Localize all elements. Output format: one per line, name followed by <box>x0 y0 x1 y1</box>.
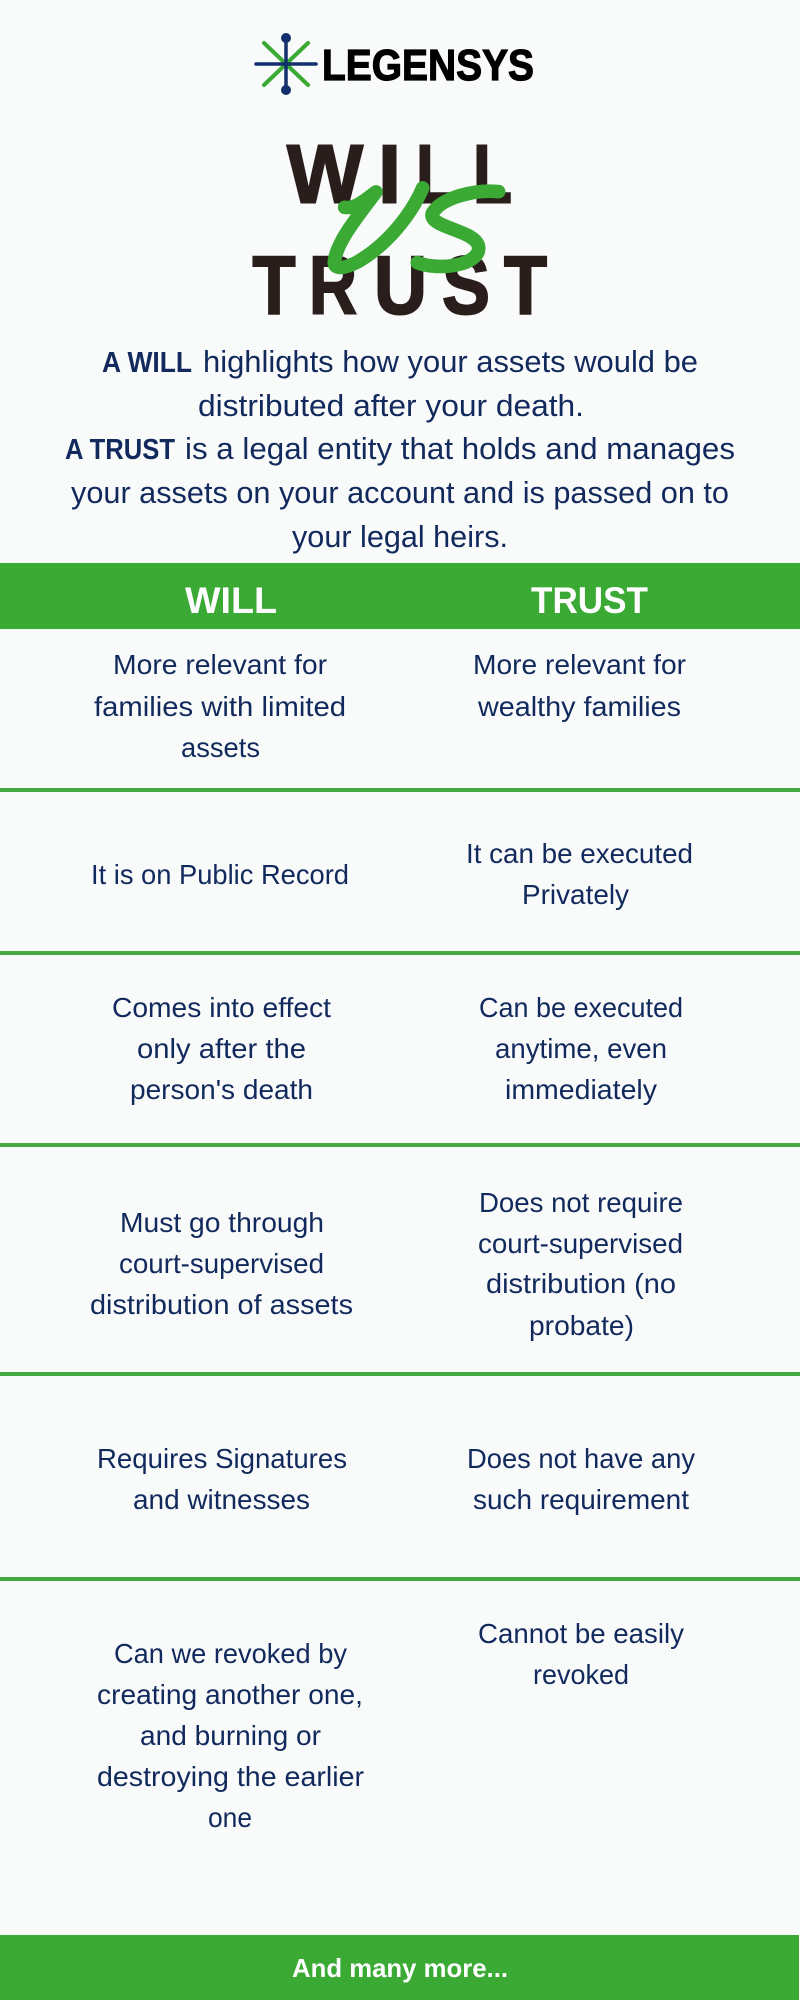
will cell: distribution of assets <box>90 1289 353 1320</box>
trust cell: court-supervised <box>478 1228 683 1259</box>
will cell: Comes into effect <box>112 992 331 1023</box>
trust cell: such requirement <box>473 1484 689 1515</box>
title word: TRUST: T <box>252 238 296 332</box>
trust cell: wealthy families <box>477 691 681 722</box>
text block: intro definitions: distributed after your death. <box>198 389 584 423</box>
will cell: destroying the earlier <box>97 1761 364 1792</box>
trust cell: anytime, even <box>495 1033 667 1064</box>
text block: intro definitions: A TRUST <box>65 434 176 466</box>
row 2: record <box>91 838 693 910</box>
text block: intro definitions: your assets on your account and is passed on to <box>71 476 729 510</box>
trust cell: It can be executed <box>466 838 693 869</box>
column heading: WILL: WILL <box>185 580 277 621</box>
text block: intro definitions: your legal heirs. <box>292 520 508 554</box>
trust cell: Can be executed <box>479 992 683 1023</box>
row 4: probate <box>90 1187 683 1341</box>
title word: WILL: W <box>287 128 364 220</box>
trust cell <box>478 1187 683 1341</box>
title: Will vs Trust <box>252 128 547 332</box>
will cell <box>90 1207 353 1320</box>
will cell: and witnesses <box>133 1484 310 1515</box>
icon: logo asterisk <box>256 33 316 95</box>
will cell: assets <box>181 732 260 763</box>
will cell <box>94 649 346 763</box>
title word: TRUST: R <box>309 238 357 332</box>
trust cell: Does not require <box>479 1187 683 1218</box>
row 3: timing <box>112 992 683 1105</box>
will cell <box>112 992 331 1105</box>
trust cell: More relevant for <box>473 649 686 680</box>
trust cell <box>478 1618 684 1690</box>
title word: WILL: L <box>473 128 512 220</box>
will cell: Must go through <box>120 1207 324 1238</box>
row 6: revocation <box>97 1618 684 1833</box>
will cell: It is on Public Record <box>91 859 349 890</box>
will cell: court-supervised <box>119 1248 324 1279</box>
will cell <box>97 1443 347 1515</box>
will cell: person's death <box>130 1074 313 1105</box>
text block: intro definitions: A WILL <box>102 347 192 379</box>
logo wordmark: LEGENSYS <box>322 41 534 90</box>
trust cell <box>479 992 683 1105</box>
trust cell: Does not have any <box>467 1443 695 1474</box>
icon: handwritten vs brush lettering <box>334 188 499 267</box>
will cell: one <box>208 1802 252 1833</box>
title word: TRUST: T <box>504 238 547 332</box>
text block: intro definitions <box>65 345 735 554</box>
will cell: More relevant for <box>113 649 327 680</box>
footer band <box>0 1935 799 2000</box>
title word: WILL: I <box>378 128 401 220</box>
trust cell: Privately <box>522 879 629 910</box>
row 1: relevance <box>94 649 686 763</box>
column heading: TRUST: TRUST <box>531 580 648 621</box>
title word: WILL <box>287 128 512 220</box>
title word: TRUST: U <box>374 238 427 332</box>
trust cell: probate) <box>529 1310 634 1341</box>
will cell: only after the <box>137 1033 306 1064</box>
table header band <box>0 563 800 629</box>
will cell: and burning or <box>140 1720 321 1751</box>
logo: Legensys <box>256 33 534 95</box>
trust cell: Cannot be easily <box>478 1618 684 1649</box>
will cell: Can we revoked by <box>114 1638 347 1669</box>
row 5: signatures <box>97 1443 695 1515</box>
trust cell: immediately <box>505 1074 657 1105</box>
will cell: Requires Signatures <box>97 1443 347 1474</box>
trust cell <box>467 1443 695 1515</box>
title word: TRUST: S <box>442 238 490 332</box>
will cell <box>97 1638 364 1833</box>
footer text: And many more... <box>292 1953 508 1983</box>
trust cell: revoked <box>533 1659 629 1690</box>
will cell: families with limited <box>94 691 346 722</box>
trust cell <box>473 649 686 722</box>
title word: WILL: L <box>416 128 455 220</box>
title word: TRUST <box>252 238 547 332</box>
will cell: creating another one, <box>97 1679 363 1710</box>
text block: intro definitions: highlights how your assets would be <box>203 345 698 379</box>
trust cell <box>466 838 693 910</box>
trust cell: distribution (no <box>486 1268 676 1299</box>
text block: intro definitions: is a legal entity that holds and manages <box>185 432 735 466</box>
